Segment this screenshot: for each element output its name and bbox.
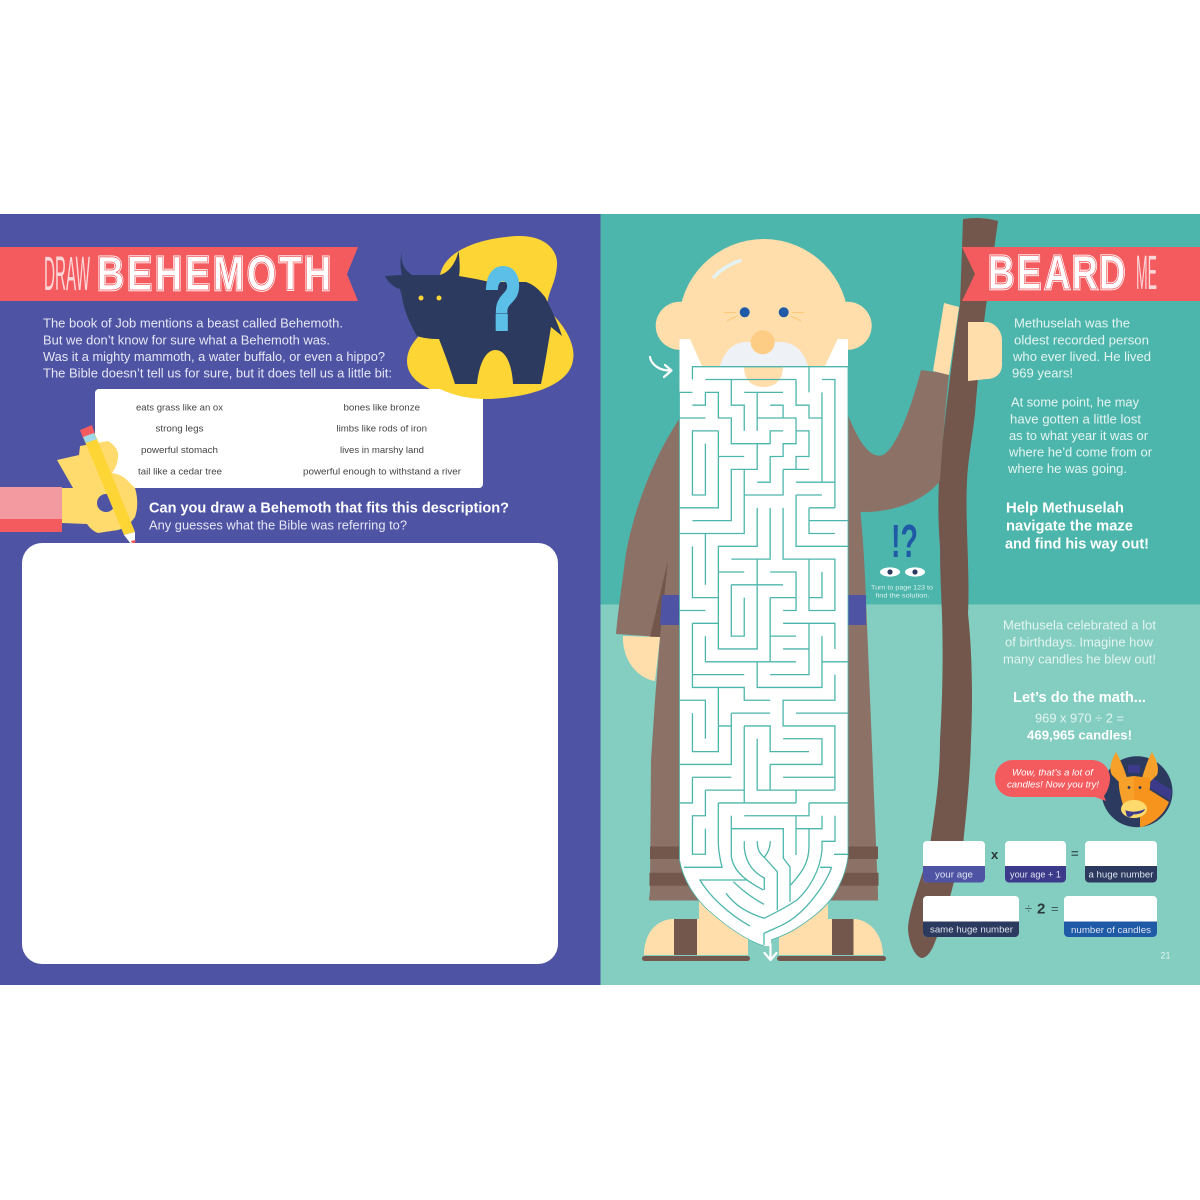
text block: candle math: 969 x 970 ÷ 2 = — [1035, 710, 1124, 726]
icon: maze entry arrow — [650, 357, 672, 377]
text: divide by two: 2 — [1037, 900, 1045, 918]
text block: behemoth introduction: The book of Job mentions a beast called Behemoth. — [43, 316, 343, 330]
staff hand — [933, 303, 959, 375]
text block: candle math: Let’s do the math... — [1013, 689, 1146, 706]
heading: maze call to action — [1005, 500, 1149, 552]
text block: Methuselah facts: where he’d come from or — [1008, 444, 1153, 460]
chart: beard maze — [680, 366, 848, 946]
panel: huge number input: a huge number — [1088, 870, 1154, 880]
text block: behemoth introduction: The Bible doesn’t tell us for sure, but it does tell us a little bit: — [43, 366, 392, 380]
panel: behemoth description list: powerful stomach — [141, 445, 218, 456]
maze edges — [680, 366, 848, 946]
panel: right page lower background — [600, 604, 1200, 985]
panel: your age plus one input — [1005, 841, 1066, 882]
beard shape — [680, 339, 848, 946]
text block: Methuselah facts: where he was going. — [1007, 461, 1127, 476]
icon: yellow blob behind behemoth — [407, 236, 573, 399]
text block: birthday candles intro: many candles he blew out! — [1003, 652, 1156, 666]
left hand — [623, 636, 660, 681]
robe bands — [650, 846, 878, 859]
text: page number: 21 — [1160, 950, 1171, 960]
staff — [908, 218, 998, 958]
heading: drawing prompt: Can you draw a Behemoth that fits this description? — [149, 500, 509, 516]
panel: left page background — [0, 214, 600, 985]
heading: drawing prompt — [149, 500, 509, 532]
text: divide by two: ÷ — [1025, 901, 1032, 916]
head — [679, 239, 849, 409]
text block: behemoth introduction: Was it a mighty mammoth, a water buffalo, or even a hippo? — [43, 349, 385, 364]
banner: Draw Behemoth title: BEHEMOTH — [97, 248, 331, 301]
nose — [751, 330, 775, 354]
ears — [656, 302, 704, 350]
robe body — [649, 420, 878, 900]
chin — [744, 367, 783, 387]
panel: behemoth description list — [95, 389, 520, 488]
panel: blank drawing area — [22, 543, 558, 964]
icon: maze exit arrow — [764, 944, 776, 960]
text block: behemoth introduction: But we don’t know for sure what a Behemoth was. — [43, 332, 330, 348]
heading: maze call to action: navigate the maze — [1006, 518, 1133, 534]
callout: donkey speech bubble — [995, 760, 1110, 801]
callout: donkey speech bubble: candles! Now you try! — [1007, 780, 1099, 790]
icon: hand holding pencil — [0, 425, 137, 546]
panel: behemoth description list: lives in marshy land — [340, 445, 424, 456]
eyes — [740, 307, 750, 317]
head highlight — [714, 261, 740, 277]
text block: birthday candles intro: of birthdays. Imagine how — [1005, 634, 1154, 650]
text block: candle math: 469,965 candles! — [1027, 728, 1132, 742]
heading: drawing prompt: Any guesses what the Bible was referring to? — [149, 518, 407, 532]
icon: donkey portrait — [1102, 752, 1172, 828]
text block: Methuselah facts — [1007, 316, 1153, 476]
banner: Draw Behemoth title — [0, 247, 358, 301]
illustration: Methuselah figure — [616, 218, 1002, 961]
panel: behemoth description list: strong legs — [156, 424, 204, 434]
panel: behemoth description list: tail like a cedar tree — [138, 466, 222, 478]
panel: behemoth description list: powerful enough to withstand a river — [303, 466, 461, 478]
banner: Draw Behemoth title: DRAW — [44, 248, 90, 301]
panel: your age plus one input: your age + 1 — [1010, 870, 1061, 880]
panel: your age input: your age — [935, 870, 973, 880]
text block: candle math — [1013, 689, 1146, 742]
text block: Methuselah facts: 969 years! — [1012, 366, 1073, 380]
heading: maze call to action: and find his way out! — [1005, 536, 1149, 552]
panel: right page upper background — [600, 214, 1200, 604]
text: equals sign: = — [1071, 846, 1079, 861]
banner: Beard Me title — [962, 246, 1200, 301]
icon: behemoth silhouette with question mark: ? — [486, 253, 520, 347]
text block: Methuselah facts: At some point, he may — [1011, 394, 1139, 410]
panel: number of candles input: number of candles — [1071, 925, 1151, 936]
panel: behemoth description list: eats grass like an ox — [136, 402, 223, 414]
legs and feet — [644, 900, 760, 955]
callout: solution hint: find the solution. — [876, 592, 930, 600]
maze grid walls — [680, 367, 848, 854]
eye wrinkles — [724, 312, 804, 321]
callout: solution hint — [871, 515, 933, 600]
text block: Methuselah facts: as to what year it was or — [1009, 428, 1149, 443]
banner: Beard Me title: BEARD — [988, 246, 1125, 300]
text: divide by two: = — [1051, 901, 1059, 916]
text block: behemoth introduction — [43, 316, 392, 380]
panel: behemoth description list: limbs like rods of iron — [336, 424, 427, 434]
callout: donkey speech bubble: Wow, that’s a lot of — [1012, 768, 1094, 778]
panel: your age input — [923, 841, 985, 882]
icon: behemoth silhouette with question mark — [385, 251, 562, 384]
panel: behemoth description list: bones like bronze — [344, 402, 420, 414]
text block: Methuselah facts: who ever lived. He lived — [1012, 349, 1151, 364]
panel: same huge number input — [923, 896, 1019, 937]
left sleeve — [616, 405, 690, 637]
panel: number of candles input — [1064, 896, 1157, 937]
callout: solution hint: Turn to page 123 to — [871, 584, 933, 592]
banner: Draw Behemoth title: BEHEMOTH — [97, 248, 331, 301]
panel: same huge number input: same huge number — [930, 924, 1013, 936]
belt — [660, 595, 690, 625]
text block: Methuselah facts: oldest recorded person — [1014, 332, 1149, 348]
moustache — [720, 342, 808, 366]
text block: Methuselah facts: have gotten a little lost — [1010, 412, 1141, 426]
maze lower curved walls — [684, 803, 848, 945]
callout: solution hint: !? — [891, 515, 918, 567]
text: multiply sign: x — [991, 847, 999, 862]
text: divide by two — [1025, 900, 1059, 918]
panel: huge number input — [1085, 841, 1157, 882]
heading: maze call to action: Help Methuselah — [1006, 500, 1124, 516]
banner: Beard Me title: BEARD — [988, 246, 1125, 300]
sleeve fold — [650, 560, 668, 637]
text block: Methuselah facts: Methuselah was the — [1014, 316, 1130, 330]
right sleeve — [840, 370, 949, 512]
text block: birthday candles intro: Methusela celebrated a lot — [1003, 618, 1156, 632]
text block: birthday candles intro — [1003, 618, 1156, 666]
